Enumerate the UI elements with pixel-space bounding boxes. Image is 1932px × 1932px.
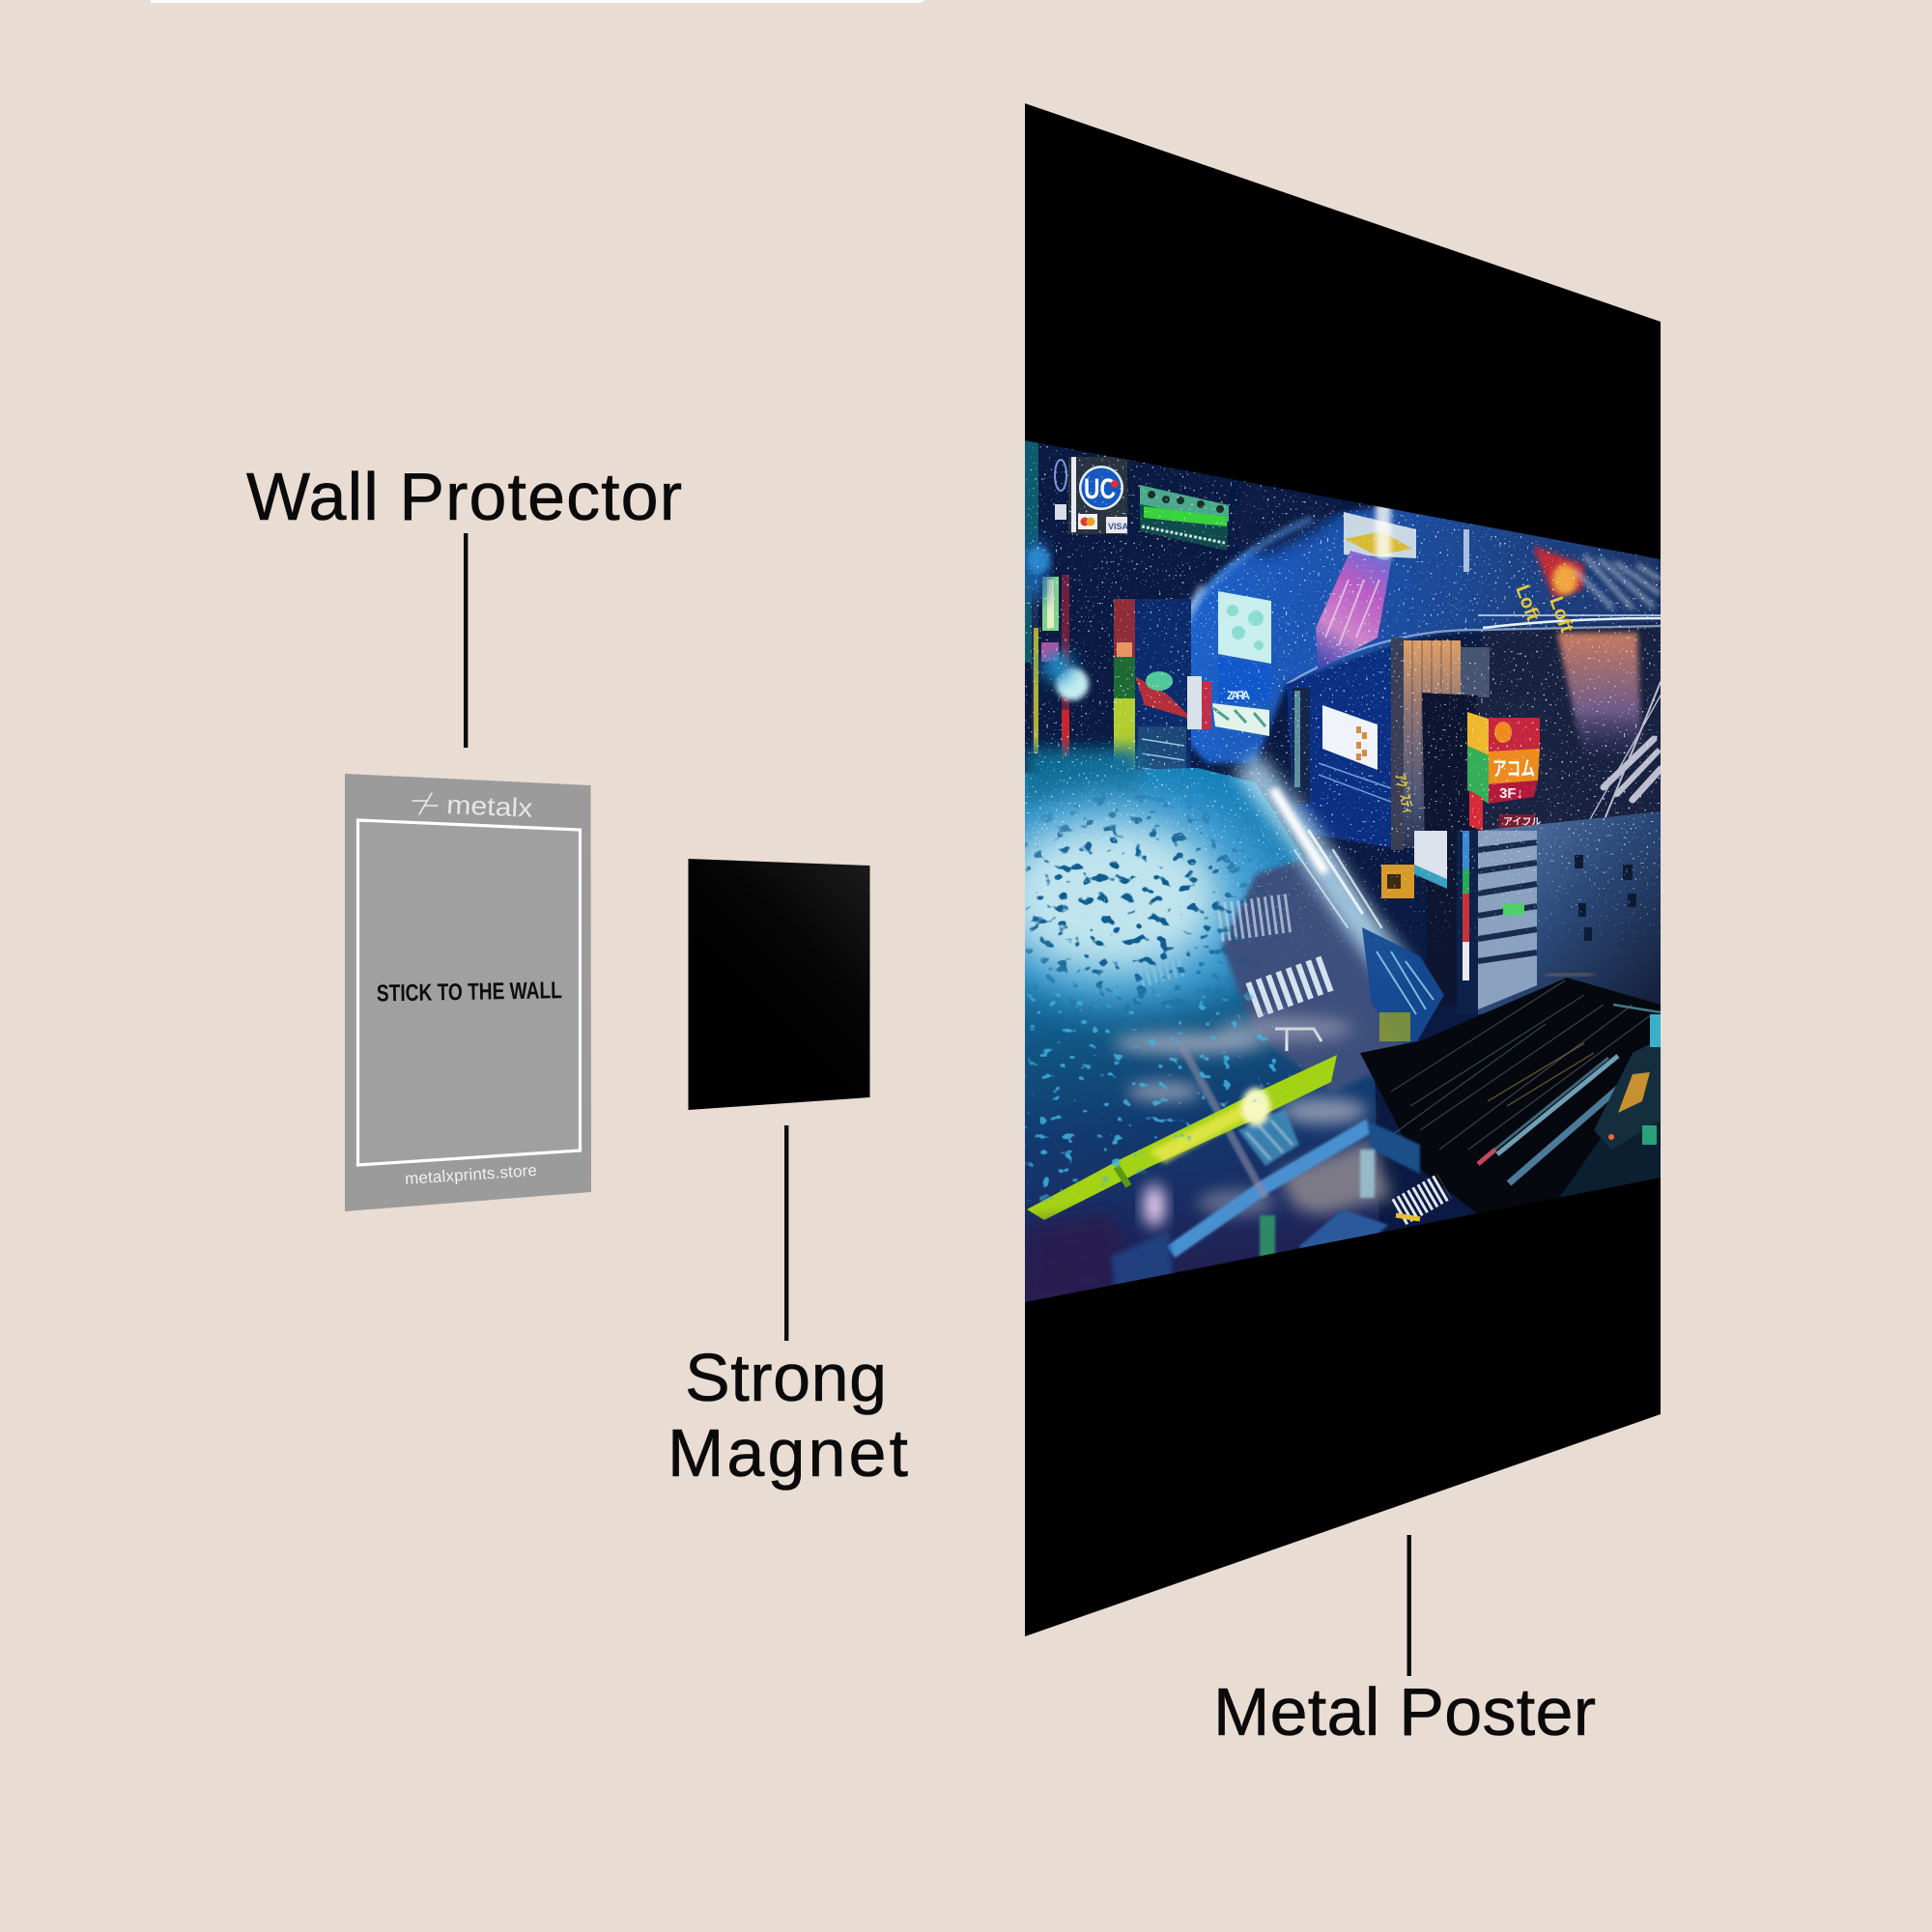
bottom left dark wedge [1025, 1212, 1140, 1314]
connector line: magnet [784, 1125, 788, 1341]
red glow top right [1533, 546, 1584, 597]
icon: metalx logo mark [412, 793, 438, 814]
label: Strong Magnet: Magnet [668, 1415, 908, 1491]
poster artwork: rainy neon city [1025, 440, 1661, 1302]
protector instruction text: STICK TO THE WALL [377, 978, 562, 1007]
blue building with white screen [1287, 647, 1391, 848]
UC card sign [1055, 457, 1129, 534]
panel: strong magnet [688, 859, 869, 1110]
left vertical signs [1025, 531, 1211, 770]
dark rail yard [1360, 974, 1661, 1217]
protector website: metalxprints.store [405, 1161, 537, 1188]
upper right blue curved canopy [1142, 502, 1661, 763]
lower crosswalk [1396, 1186, 1444, 1219]
UC card sign: VISA [1108, 522, 1129, 531]
light speck rain texture [1025, 440, 1661, 966]
droplets on pale glass [1025, 763, 1315, 1034]
dark tower with acom signs: ｱｸﾞｽﾃｨ [1393, 773, 1416, 815]
glass reflection streaks right [1589, 681, 1661, 819]
connector line: metal poster [1406, 1535, 1411, 1676]
bright diagonal streak [1246, 763, 1401, 976]
tan building [1391, 638, 1490, 850]
pale cyan billboard [1212, 591, 1271, 736]
blue pedestrian bridge [1171, 1043, 1420, 1265]
blurred lavender crossing bands [1113, 1015, 1367, 1216]
droplets on dark glass [1025, 927, 1392, 1246]
neon text: loft signs [1517, 584, 1573, 634]
poster black body [1025, 103, 1661, 1636]
label: Strong Magnet [668, 1340, 908, 1491]
panel: wall protector [345, 774, 591, 1211]
right steel building [1457, 811, 1661, 1014]
pale window glow [961, 787, 1290, 1009]
label: Metal Poster: Metal Poster [1213, 1674, 1596, 1749]
neon text: loft signs: Loft [1511, 582, 1544, 624]
pale cyan billboard: ZARA [1227, 689, 1250, 702]
neon text: acom sign: アコム [1492, 758, 1535, 781]
label: Strong Magnet: Strong [685, 1340, 887, 1415]
panel: metal poster [961, 103, 1662, 1636]
window glow left [1056, 668, 1089, 700]
protector white frame [357, 820, 580, 1165]
top white bar [151, 0, 925, 3]
dark tower with acom signs [1395, 693, 1542, 1005]
protector sheet [345, 774, 591, 1211]
lavender light orb [1144, 1184, 1165, 1227]
UC card sign: UC [1084, 473, 1116, 505]
green billboard [1140, 485, 1229, 551]
neon green bar [1027, 1055, 1337, 1220]
label: Wall Protector: Wall Protector [246, 459, 682, 534]
logo wordmark: metalx [446, 790, 533, 823]
dark tower with acom signs: 3F↓ [1499, 785, 1523, 802]
pink reflection stripe [1316, 551, 1391, 670]
small billboard and orange store [1414, 831, 1447, 882]
crosswalks [1140, 913, 1331, 1001]
dark tower with acom signs: アイフル [1503, 816, 1542, 828]
top sign over canopy [1344, 512, 1416, 558]
neon text: loft signs: Loft [1545, 594, 1577, 636]
tan road patch [1278, 1140, 1391, 1215]
road area [1222, 850, 1420, 1092]
exploded mounting diagram [151, 0, 1661, 1736]
connector line: wall protector [464, 533, 468, 748]
right lower dark upper section [1478, 623, 1661, 1005]
lower left blue field [1025, 768, 1381, 1302]
